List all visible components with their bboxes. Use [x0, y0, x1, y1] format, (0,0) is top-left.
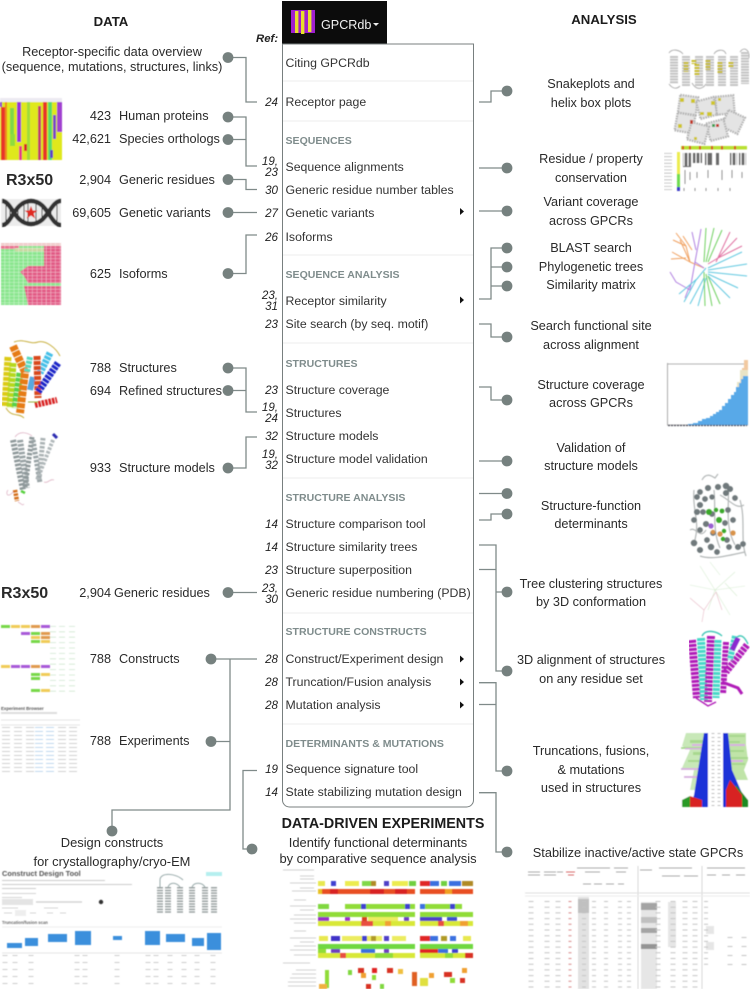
header: GPCRdb logo bar [282, 1, 387, 44]
menu section: determinants and mutations: DETERMINANTS & MUTATIONS [286, 738, 444, 750]
analysis label: structure coverage [537, 378, 645, 410]
analysis label: blast, trees, matrix: Phylogenetic trees [539, 260, 643, 274]
menu item: site search: Site search (by seq. motif) [286, 317, 428, 331]
menu section: structures: STRUCTURES [286, 358, 358, 370]
thumbnail: truncation and mutation chart [680, 732, 748, 807]
data row: human proteins and species orthologs: Species orthologs [119, 132, 220, 146]
thumbnail: structure clustering tree [690, 562, 745, 622]
analysis label: structure-function: Structure-function [541, 499, 641, 513]
thumbnail: construct design tool [2, 869, 222, 989]
analysis label: tree clustering: Tree clustering structures [520, 577, 662, 591]
data row: structures: 788 [90, 361, 111, 375]
data row: experiments: Experiments [119, 734, 190, 748]
analysis label: functional site search [530, 319, 652, 352]
reference numbers: 23, [261, 289, 278, 302]
panel: navigation menu [282, 44, 474, 807]
thumbnail: experiment browser table: Experiment Browser [1, 706, 44, 711]
thumbnail: rainbow receptor structure [5, 341, 60, 418]
analysis label: stabilize state: Stabilize inactive/active state GPCRs [533, 845, 743, 860]
menu item: receptor similarity: Receptor similarity [286, 294, 387, 308]
data row: structure models: 933 [90, 461, 111, 475]
reference numbers [261, 96, 279, 799]
thumbnail: helix box plot [675, 95, 745, 144]
menu section: sequences: SEQUENCES [286, 135, 352, 147]
analysis label: variant coverage: Variant coverage [544, 195, 638, 209]
data label: receptor-specific overview [2, 45, 222, 74]
thumbnail: grey structure model [7, 433, 57, 505]
data row: generic residues 2: Generic residues [114, 586, 210, 600]
data row: isoforms: Isoforms [119, 267, 168, 281]
reference numbers: 14 [265, 518, 279, 531]
menu item: construct design: Construct/Experiment design [286, 652, 444, 666]
analysis label: model validation: structure models [544, 459, 638, 473]
analysis label: snakeplots: helix box plots [551, 96, 631, 110]
reference numbers: 28 [264, 653, 279, 666]
label: identify functional determinants [279, 835, 477, 866]
reference numbers: 19 [265, 763, 279, 776]
data row: genetic variants: Genetic variants [119, 206, 211, 220]
menu item: truncation analysis: Truncation/Fusion analysis [286, 675, 431, 689]
label: identify functional determinants: Identify functional determinants [289, 835, 467, 850]
analysis label: variant coverage: across GPCRs [549, 214, 633, 228]
menu item: structure superposition: Structure superposition [286, 563, 412, 577]
data label: receptor-specific overview: Receptor-specific data overview [22, 45, 203, 59]
analysis label: truncations, fusions, mutations: Truncations, fusions, [533, 744, 649, 758]
reference numbers: 23 [264, 564, 279, 577]
data row: structures: Structures [119, 361, 177, 375]
analysis label: structure-function: determinants [554, 517, 628, 531]
data row: human proteins and species orthologs [72, 109, 220, 146]
reference numbers: 14 [265, 786, 279, 799]
label: identify functional determinants: by comparative sequence analysis [279, 851, 477, 866]
thumbnail: construct table [1, 625, 72, 693]
reference numbers: 23, [261, 582, 278, 595]
reference numbers: 30 [265, 184, 279, 197]
thumbnail: construct design tool: Construct Design Tool [2, 869, 81, 878]
thumbnail: experiment browser table [1, 706, 80, 775]
heading: data: DATA [94, 14, 129, 29]
thumbnail: sequence alignment [0, 98, 62, 160]
thumbnail: structure with determinant spheres [690, 474, 746, 558]
menu item: structure similarity trees: Structure similarity trees [286, 540, 417, 554]
reference numbers: 23 [264, 318, 279, 331]
data label: receptor-specific overview: (sequence, mutations, structures, links) [2, 60, 222, 74]
analysis label: blast, trees, matrix [539, 241, 643, 292]
menu item: state stabilizing mutation design: State stabilizing mutation design [286, 785, 462, 799]
analysis label: tree clustering: by 3D conformation [536, 595, 646, 609]
data row: human proteins and species orthologs: 42,621 [72, 132, 111, 146]
thumbnail: conservation matrix [668, 146, 747, 191]
connectors: menu to analysis [479, 86, 512, 857]
data row: generic residues: Generic residues [119, 173, 215, 187]
reference numbers: 27 [264, 207, 279, 220]
analysis label: tree clustering [520, 577, 662, 609]
analysis label: truncations, fusions, mutations: & mutations [558, 763, 624, 777]
analysis label: blast, trees, matrix: BLAST search [550, 241, 632, 255]
menu item: structure model validation: Structure model validation [286, 452, 428, 466]
analysis label: truncations, fusions, mutations [533, 744, 649, 795]
analysis label: 3D alignment [517, 653, 665, 686]
reference numbers: 32 [265, 430, 279, 443]
analysis label: structure coverage: across GPCRs [549, 396, 633, 410]
data row: structure models: Structure models [119, 461, 215, 475]
data row: structures: Refined structures [119, 384, 222, 398]
menu section: structure constructs: STRUCTURE CONSTRUCTS [286, 626, 427, 638]
data row: isoforms: 625 [90, 267, 111, 281]
icon: submenu arrows [460, 208, 464, 708]
label: design constructs: for crystallography/cryo-EM [34, 854, 190, 869]
thumbnail: isoform matrix [1, 243, 61, 305]
generic residue notation 2: R3x50 [1, 585, 48, 602]
reference numbers: 28 [264, 699, 279, 712]
reference numbers: 31 [265, 300, 278, 313]
analysis label: model validation [544, 441, 638, 473]
menu section: sequence analysis: SEQUENCE ANALYSIS [286, 269, 400, 281]
connectors: data to menu [107, 52, 257, 854]
menu item: mutation analysis: Mutation analysis [286, 698, 381, 712]
data row: genetic variants: 69,605 [72, 206, 111, 220]
menu item: generic residue numbering: Generic residue numbering (PDB) [286, 586, 471, 600]
reference numbers: 23 [264, 166, 279, 179]
data row: constructs: Constructs [119, 652, 180, 666]
thumbnail: state stabilizing mutation table [525, 866, 750, 989]
analysis label: truncations, fusions, mutations: used in structures [541, 781, 641, 795]
analysis label: functional site search: across alignment [543, 338, 639, 352]
thumbnail: snake plot [669, 49, 749, 88]
data row: structures [90, 361, 222, 398]
data row: human proteins and species orthologs: Human proteins [119, 109, 209, 123]
header: GPCRdb logo bar: GPCRdb [321, 18, 371, 32]
menu item: structure comparison tool: Structure comparison tool [286, 517, 426, 531]
analysis label: conservation: conservation [555, 171, 627, 185]
thumbnail: structure coverage bar chart [668, 360, 748, 426]
thumbnail: construct design tool: Truncation/fusion scan [2, 920, 48, 925]
analysis label: snakeplots [547, 77, 635, 110]
heading: data-driven experiments: DATA-DRIVEN EXPERIMENTS [282, 816, 484, 832]
analysis label: structure coverage: Structure coverage [537, 378, 645, 392]
analysis label: 3D alignment: on any residue set [539, 672, 643, 686]
data row: constructs [90, 652, 180, 666]
analysis label: structure-function [541, 499, 641, 531]
reference numbers: 28 [264, 676, 279, 689]
data row: generic residues 2: 2,904 [79, 586, 111, 600]
label: reference column: Ref: [256, 33, 278, 45]
menu item: structure models: Structure models [286, 429, 378, 443]
menu section: structure analysis: STRUCTURE ANALYSIS [286, 492, 405, 504]
menu item: structure coverage: Structure coverage [286, 383, 390, 397]
menu item: isoforms: Isoforms [286, 230, 333, 244]
reference numbers: 30 [265, 593, 279, 606]
analysis label: model validation: Validation of [557, 441, 626, 455]
reference numbers: 14 [265, 541, 279, 554]
analysis label: variant coverage [544, 195, 638, 228]
menu item: sequence alignments: Sequence alignments [286, 160, 404, 174]
analysis label: conservation [539, 152, 643, 185]
reference numbers: 24 [264, 412, 279, 425]
reference numbers: 26 [264, 231, 279, 244]
data row: genetic variants [72, 206, 211, 220]
menu item: sequence signature tool: Sequence signature tool [286, 762, 418, 776]
menu item: generic residue number tables: Generic residue number tables [286, 183, 454, 197]
reference numbers: 19, [262, 401, 278, 414]
thumbnail: sequence signature panel [283, 870, 473, 989]
data row: human proteins and species orthologs: 423 [90, 109, 111, 123]
reference numbers: 32 [265, 459, 279, 472]
menu item: genetic variants: Genetic variants [286, 206, 374, 220]
data row: isoforms [90, 267, 168, 281]
generic residue notation: R3x50 [6, 172, 53, 189]
data row: experiments: 788 [90, 734, 111, 748]
label: design constructs [34, 835, 190, 869]
heading: analysis: ANALYSIS [571, 12, 637, 27]
icon: DNA variant [1, 199, 61, 226]
data row: generic residues: 2,904 [79, 173, 111, 187]
thumbnail: 3D structural alignment [692, 631, 748, 706]
reference numbers: 24 [264, 96, 279, 109]
analysis label: conservation: Residue / property [539, 152, 643, 166]
analysis label: blast, trees, matrix: Similarity matrix [546, 278, 636, 292]
analysis label: snakeplots: Snakeplots and [547, 77, 635, 91]
reference numbers: 19, [262, 448, 278, 461]
reference numbers: 19, [262, 155, 278, 168]
reference numbers: 23 [264, 384, 279, 397]
analysis label: functional site search: Search functional site [530, 319, 652, 333]
thumbnail: phylogenetic tree [670, 228, 747, 306]
data row: constructs: 788 [90, 652, 111, 666]
menu item: structures: Structures [286, 406, 342, 420]
menu item: receptor page: Receptor page [286, 95, 366, 109]
label: design constructs: Design constructs [61, 835, 163, 850]
menu item: citing: Citing GPCRdb [286, 56, 370, 70]
analysis label: 3D alignment: 3D alignment of structures [517, 653, 665, 667]
data row: structures: 694 [90, 384, 111, 398]
